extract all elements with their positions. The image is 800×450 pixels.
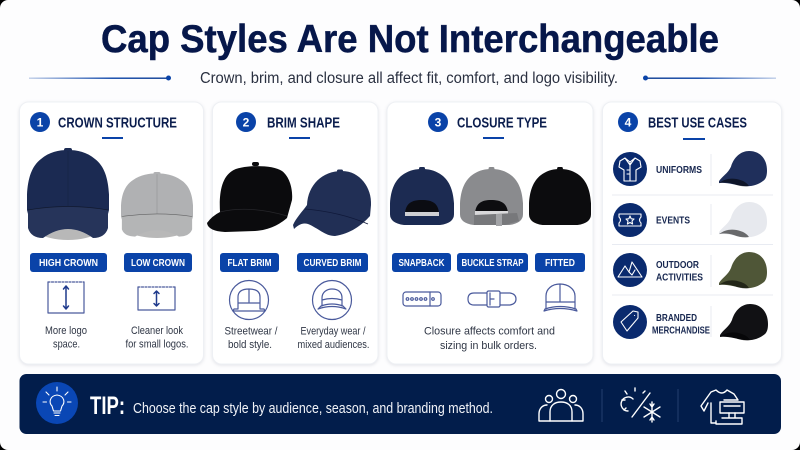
row: uniforms xyxy=(613,151,767,186)
chip: buckle strap xyxy=(457,253,528,272)
text: more logo space: More logo xyxy=(45,325,87,337)
cap: navy xyxy=(719,151,767,186)
chip: low crown xyxy=(124,253,192,272)
title: Cap Styles Are Not Interchangeable xyxy=(101,18,719,61)
number badge 1: 1 xyxy=(37,116,44,130)
row: events xyxy=(613,202,767,237)
icon: season sun and snow xyxy=(621,388,660,422)
text: closure affects comfort xyxy=(424,326,555,352)
text: streetwear: bold style. xyxy=(228,339,272,351)
tip label: TIP: xyxy=(90,392,125,420)
row: branded merchandise xyxy=(613,304,768,340)
text: closure affects comfort: sizing in bulk orders. xyxy=(440,340,537,352)
chip: curved brim xyxy=(297,253,368,272)
panel: brim shape xyxy=(207,102,378,364)
label: branded merchandise xyxy=(652,313,710,336)
cap: white xyxy=(719,202,767,237)
chip: flat brim: FLAT BRIM xyxy=(228,258,272,269)
label: outdoor activities xyxy=(656,260,703,284)
number badge 2 xyxy=(236,112,256,132)
text: more logo space xyxy=(45,325,87,350)
icon: branding print xyxy=(701,390,744,424)
subtitle rule right xyxy=(643,76,776,80)
curved brim cap xyxy=(293,170,371,236)
subtitle: Crown, brim, and closure all affect fit, comfort, and logo visibility. xyxy=(200,70,618,87)
icon: short crown height xyxy=(138,287,175,310)
label: branded merchandise: MERCHANDISE xyxy=(652,326,710,336)
cap: olive xyxy=(719,252,767,288)
label: outdoor activities: OUTDOOR xyxy=(656,260,700,271)
number badge 3 xyxy=(428,112,448,132)
icon: flat brim outline xyxy=(230,280,268,320)
text: streetwear xyxy=(224,326,278,351)
chip: high crown: HIGH CROWN xyxy=(39,258,98,269)
panel: best use cases xyxy=(602,102,782,364)
number badge 1 xyxy=(30,112,50,132)
subtitle rule left xyxy=(29,76,171,80)
low crown cap xyxy=(121,172,193,238)
text: everyday wear: mixed audiences. xyxy=(298,339,370,351)
icon: mountains xyxy=(613,253,647,287)
text: closure affects comfort: Closure affects comfort and xyxy=(424,326,555,338)
panel: crown structure xyxy=(20,102,204,364)
label: events: EVENTS xyxy=(656,216,690,226)
number badge 4 xyxy=(618,112,638,132)
icon: ticket xyxy=(613,203,647,237)
chip: snapback: SNAPBACK xyxy=(398,258,445,269)
chip: curved brim: CURVED BRIM xyxy=(304,258,362,269)
icon: tall crown height xyxy=(48,282,84,313)
heading: crown structure: CROWN STRUCTURE xyxy=(58,114,177,132)
icon: audience xyxy=(539,390,583,421)
text: streetwear: Streetwear / xyxy=(224,326,278,338)
heading: closure type: CLOSURE TYPE xyxy=(457,114,547,132)
row: outdoor activities xyxy=(613,252,767,288)
text: everyday wear xyxy=(298,326,370,351)
chip: fitted: FITTED xyxy=(545,258,575,269)
flat brim cap xyxy=(207,162,292,232)
tip bar xyxy=(20,374,781,434)
chip: flat brim xyxy=(220,253,279,272)
text: cleaner look: for small logos. xyxy=(126,338,188,350)
text: everyday wear: Everyday wear / xyxy=(300,326,366,338)
chip: fitted xyxy=(535,253,585,272)
icon: buckle strap xyxy=(468,291,516,307)
icon: curved brim outline xyxy=(312,280,352,320)
icon: price tag xyxy=(613,305,647,339)
cap: black xyxy=(720,304,768,340)
label: branded merchandise: BRANDED xyxy=(656,313,697,324)
icon: snapback strap xyxy=(403,292,441,306)
panel: closure type xyxy=(387,102,593,364)
heading: brim shape: BRIM SHAPE xyxy=(267,114,340,132)
heading: best use cases: BEST USE CASES xyxy=(648,114,747,132)
label: outdoor activities: ACTIVITIES xyxy=(656,272,703,284)
chip: snapback xyxy=(392,253,451,272)
number badge 3: 3 xyxy=(435,116,442,130)
text: cleaner look xyxy=(126,325,188,350)
text: cleaner look: Cleaner look xyxy=(131,325,183,337)
tip text: Choose the cap style by audience, season, and branding method. xyxy=(133,401,493,417)
chip: buckle strap: BUCKLE STRAP xyxy=(462,258,524,269)
number badge 2: 2 xyxy=(243,116,250,130)
label: uniforms: UNIFORMS xyxy=(656,165,702,176)
high crown cap xyxy=(27,148,109,240)
buckle strap cap back view xyxy=(460,167,523,226)
chip: low crown: LOW CROWN xyxy=(131,258,185,269)
icon: fitted cap xyxy=(544,284,577,311)
fitted cap back view xyxy=(529,167,591,225)
text: more logo space: space. xyxy=(53,338,80,350)
snapback cap back view xyxy=(390,167,454,225)
number badge 4: 4 xyxy=(625,116,632,130)
icon: shirt xyxy=(613,152,647,186)
chip: high crown xyxy=(30,253,107,272)
icon: light bulb xyxy=(36,382,78,424)
